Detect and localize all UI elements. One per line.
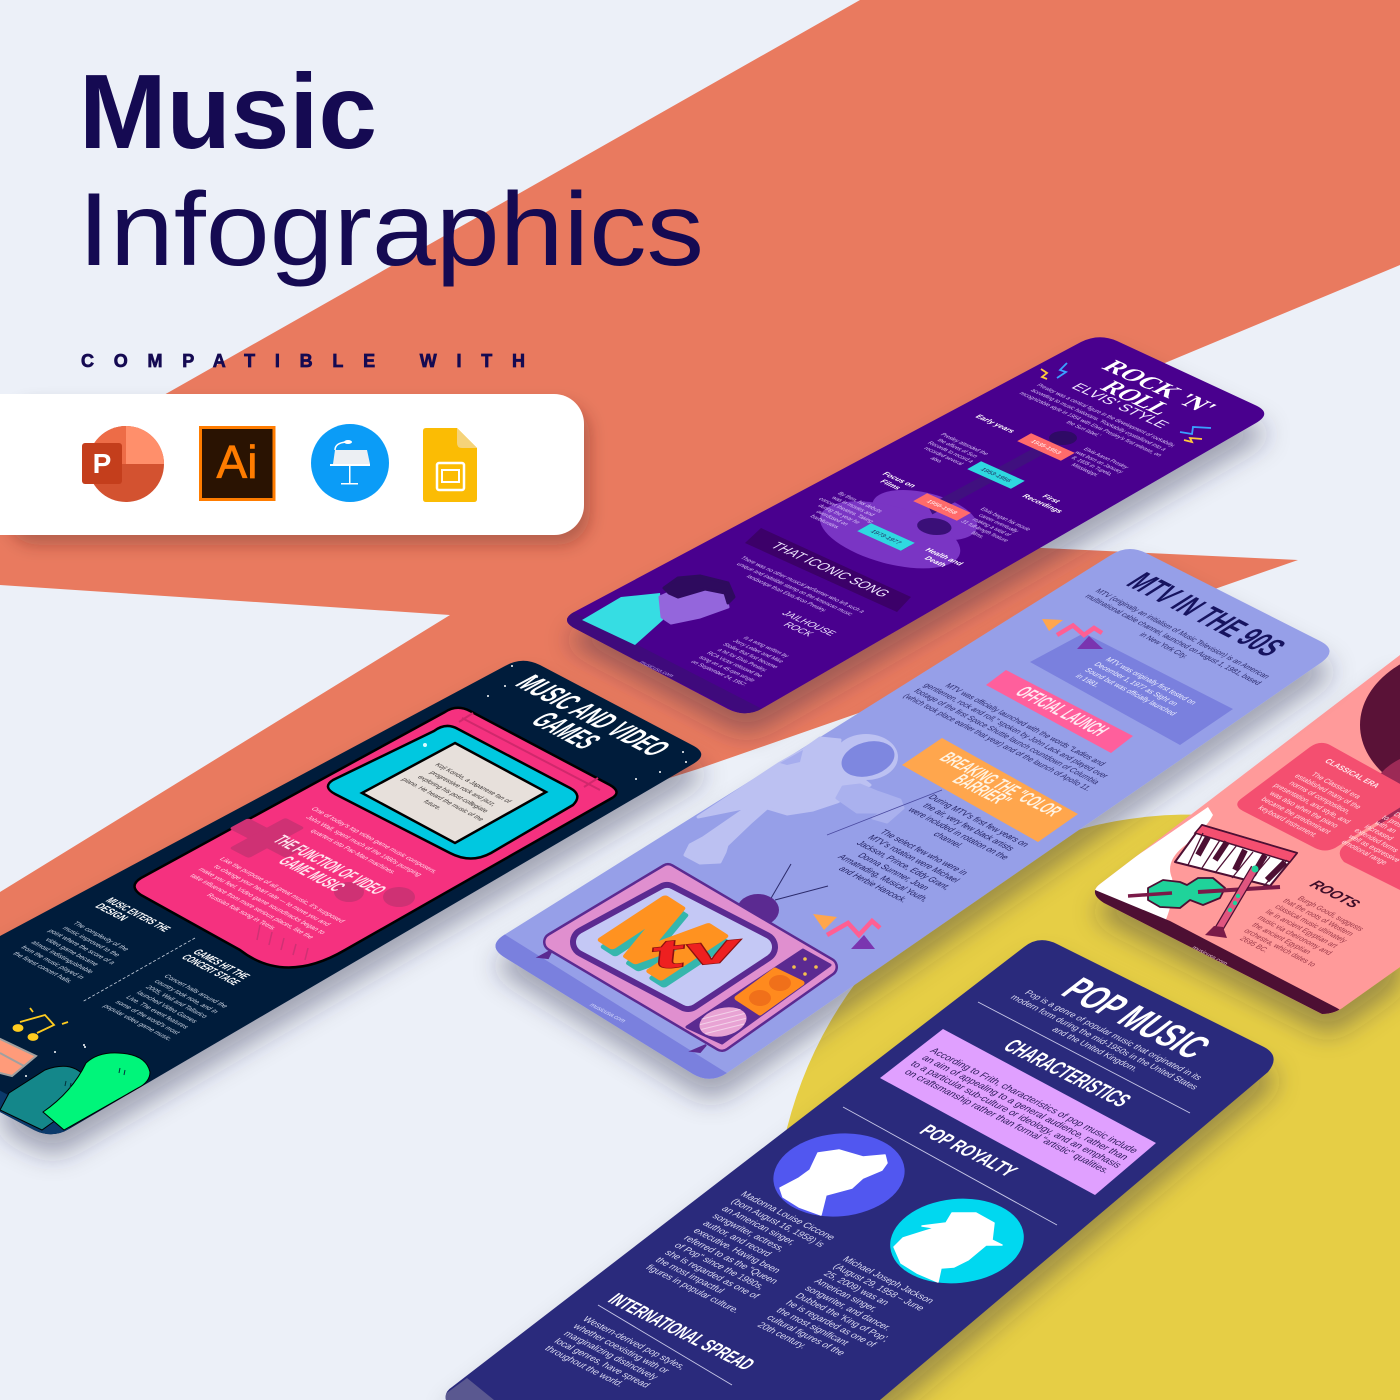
text: health detail: barbiturates.: [808, 514, 841, 530]
heading: classical era: CLASSICAL ERA: [1323, 757, 1382, 789]
text: Michael Jackson biography: American singer,: [811, 1277, 880, 1314]
label: official launch: [986, 670, 1133, 753]
label: First Recordings: First: [1040, 493, 1063, 504]
text: health detail: By then, his debuts: [835, 492, 883, 514]
text: concert stage detail: some of the world's most: [113, 1000, 181, 1036]
icon: zigzag shapes bottom: [813, 914, 880, 949]
text: concert stage detail: country took note, and in: [152, 979, 220, 1015]
date tag 1956-1958: [913, 493, 971, 521]
text: Jailhouse Rock detail: song on a 45-rpm single: [697, 656, 757, 683]
text: pop intro: and the United Kingdom.: [1050, 1025, 1141, 1073]
heading: pop music: POP MUSIC: [1052, 971, 1221, 1065]
text: tested note: in 1981.: [1073, 672, 1103, 689]
background orange shape: [0, 0, 1400, 1000]
text: select few detail: Jackson, Prince, Eddy Grant,: [854, 839, 954, 891]
panel: music and video games card: [0, 661, 701, 1145]
text: pop intro: Pop is a genre of popular music that originated in its: [1022, 988, 1205, 1082]
panel: classical era: [1237, 743, 1400, 850]
text: recordings detail: Presley attended the: [938, 433, 990, 457]
label: official launch: OFFICIAL LAUNCH: [1010, 683, 1115, 739]
text: roots detail: music via cheironomy and: [1255, 914, 1335, 957]
text: MTV intro: multinational cable channel, launched on August 1, 1981, based: [1083, 593, 1264, 686]
heading: games hit the concert stage: GAMES HIT THE: [190, 947, 253, 981]
subheading: Elvis' style: ELVIS' STYLE: [1067, 381, 1173, 430]
heading: Jailhouse Rock: JAILHOUSE: [779, 610, 838, 638]
text: Madonna biography: author, and record: [700, 1219, 774, 1259]
text: pop intro: modern form during the mid-1950s in the United States: [1008, 993, 1201, 1091]
icon: Illustrator: Ai: [217, 436, 257, 488]
heading: function of video game music: GAME MUSIC: [273, 854, 350, 894]
violin: [1128, 878, 1280, 908]
footer strip: [567, 612, 762, 714]
text: music enters detail: point where the score of a: [46, 929, 117, 966]
icon: PowerPoint: [82, 426, 164, 502]
footer strip: [1094, 890, 1340, 1014]
heading: Rock 'n' Roll: ROLL: [1094, 377, 1179, 418]
panel: tested note: [1030, 633, 1233, 745]
MTV logo: tv: [641, 924, 755, 978]
divider lines: [598, 1002, 1190, 1385]
illustration: guitar: [795, 431, 1077, 581]
heading: games hit the concert stage: CONCERT STAGE: [178, 953, 244, 987]
TV control panel: [687, 950, 830, 1043]
text: color barrier detail: During MTV's first few years on: [926, 793, 1032, 848]
label: Early years: Early years: [973, 413, 1017, 434]
text: roots detail: the ancient Egyptian: [1250, 921, 1314, 956]
text: function detail: make you feel. Video game soundtracks began to: [196, 867, 327, 935]
text: characteristics detail: on craftsmanship rather than formal "artistic" qualities.: [901, 1068, 1112, 1176]
text: early years detail: Mississippi.: [1069, 463, 1100, 478]
console speaker grooves: [257, 925, 308, 960]
illustration: MTV television: [539, 864, 830, 1052]
text: second box detail: increased: [1362, 823, 1396, 842]
text: films detail: making a total of: [970, 518, 1012, 537]
text: concert stage detail: popular video game music.: [101, 1004, 174, 1042]
screen text: future.: [421, 799, 443, 811]
text: Madonna biography: figures in popular culture.: [643, 1263, 742, 1315]
text: function detail: take influence from more serious places, like the: [188, 873, 315, 940]
label: Focus on Films: Films: [878, 478, 903, 491]
text: roots detail: orchestra, which dates to: [1242, 927, 1318, 968]
screen text: piano. He heard the music of the: [399, 777, 486, 822]
label: breaking the color barrier: [902, 738, 1078, 842]
TV dial buttons: [737, 970, 802, 1013]
text: official launch detail: gentlemen, rock and roll," spoken by John Lack and played over: [921, 682, 1111, 780]
icon: music note: [14, 1008, 68, 1040]
text: Madonna biography: the most impactful: [652, 1256, 727, 1295]
text: roots detail: lie in ancient Egyptian art: [1263, 908, 1341, 950]
text: films detail: Elvis began his movie: [978, 507, 1032, 532]
decoration: confetti zigzags: [1041, 363, 1211, 442]
text: official launch detail: (which took place earlier that year) and of the launch of Apollo 11.: [901, 692, 1094, 792]
illustration: game console: [134, 708, 617, 968]
text: music enters detail: The complexity of the: [71, 921, 130, 952]
icon: Google Slides: [423, 428, 477, 502]
text: music enters detail: almost indistinguishable: [29, 940, 95, 975]
footer: musicusa: musicusa.com: [1189, 945, 1229, 967]
text: Madonna biography: she is regarded as one of: [662, 1248, 762, 1301]
text: second box detail: with an: [1372, 819, 1399, 835]
text: recordings detail: Records to record a: [925, 441, 975, 464]
text: international spread detail: Western-derived pop styles,: [580, 1315, 688, 1372]
panel: pop music card: [440, 940, 1274, 1400]
text: characteristics detail: According to Frith, characteristics of pop music include: [927, 1047, 1141, 1156]
text: second box detail: emotional range: [1339, 838, 1390, 866]
text: tested note: December 1, 1977 as Sight on: [1092, 661, 1181, 707]
label: breaking the color barrier: BARRIER": [947, 771, 1016, 809]
text: Michael Jackson biography: cultural figures of the: [764, 1313, 848, 1358]
text: tested note: MTV was originally first tested on: [1103, 656, 1199, 706]
text: Madonna biography: an American singer,: [719, 1205, 798, 1247]
heading: function of video game music: [268, 833, 391, 897]
text: concert stage detail: Live. The event features: [124, 995, 190, 1030]
MTV logo: M: [576, 882, 749, 995]
console screen surround: [328, 726, 577, 858]
screen text: progressive rock and jazz,: [427, 770, 498, 807]
white corner shape: [1090, 807, 1213, 922]
intro text: according to music historians. 'Rockabilly crystallized into a: [1028, 388, 1169, 452]
illustration: ghost characters: [0, 1053, 150, 1130]
text: Madonna biography: songwriter, actress,: [709, 1212, 788, 1254]
text: select few detail: Armatrading, Musical Youth,: [836, 853, 932, 903]
footer strip: [496, 934, 727, 1079]
icon: Keynote: [311, 424, 389, 502]
label: Focus on Films: Focus on: [880, 471, 919, 489]
decoration: stars: [25, 665, 687, 1077]
text: Madonna biography: of Pop" since the 1980s,: [671, 1241, 767, 1292]
text: Madonna biography: referred to as the "Queen: [681, 1234, 780, 1286]
text: official launch detail: MTV was officially launched with the words "Ladies and: [943, 682, 1108, 767]
text: Michael Jackson biography: 20th century.: [754, 1321, 809, 1351]
text: Michael Jackson biography: he is regarded as one of: [783, 1299, 879, 1349]
heading: music and video games: [507, 671, 679, 761]
text: Jailhouse Rock detail: Stoller that first became: [721, 643, 780, 670]
text: iconic song intro: There was no other musical performer who left such a: [738, 556, 867, 614]
date tag 1935-1953: 1935-1953: [1028, 439, 1063, 455]
text: Madonna biography: executive. Having been: [690, 1226, 783, 1275]
text: films detail: films.: [968, 531, 986, 540]
text: Michael Jackson biography: songwriter, and dancer.: [802, 1284, 894, 1333]
text: Michael Jackson biography: Michael Joseph Jackson: [840, 1255, 936, 1306]
text: recordings detail: the offices of Sun: [935, 438, 979, 459]
console screen: [362, 743, 546, 843]
label: Health and Death: Health and: [923, 547, 966, 567]
heading: function of video game music: THE FUNCTION OF VIDEO: [268, 833, 391, 897]
text: composers: One of today's top video game music composers,: [309, 807, 439, 875]
heading: Jailhouse Rock: ROCK: [780, 621, 816, 638]
text: Michael Jackson biography: the most significant: [773, 1306, 851, 1348]
text: select few detail: The select few who were in: [877, 828, 971, 877]
text: select few detail: MTV's rotation were Michael: [866, 833, 963, 884]
text: international spread detail: whether coexisting with or: [569, 1322, 672, 1375]
text: classical era detail: The Classical era: [1309, 771, 1364, 801]
pointer line: [827, 790, 942, 835]
portrait: Michael Jackson: [863, 1182, 1051, 1300]
text: classical era detail: keyboard instrument.: [1256, 804, 1320, 839]
text: Michael Jackson biography: 25, 2009) was an: [821, 1270, 891, 1307]
text: music enters detail: the finest concert halls.: [11, 951, 74, 985]
text: Jailhouse Rock detail: a hit for Elvis Presley.: [715, 648, 769, 673]
illustration: Elvis: [582, 576, 734, 645]
panel: compatible software: [0, 394, 584, 535]
panel: classical music card: [1088, 645, 1400, 1022]
title: Music: [79, 53, 377, 171]
panel: MTV in the 90s card: [480, 549, 1330, 1090]
text: health detail: overdosed on: [814, 510, 849, 527]
text: Madonna biography: (born August 16, 1958) is: [728, 1197, 827, 1249]
text: classical era detail: established many of the: [1292, 772, 1364, 811]
text: color barrier detail: were included in rotation on the: [905, 805, 1012, 861]
text: music enters detail: video game became: [43, 937, 100, 967]
MTV logo: M: [579, 889, 752, 1002]
text: concert stage detail: 2005, Wall and Tallarico: [143, 985, 209, 1019]
date tag 1953-1956: [967, 461, 1025, 489]
piano: [1175, 825, 1297, 887]
text: classical era detail: presentation, and style, and: [1271, 781, 1353, 825]
text: films detail: 31 full-length feature: [959, 520, 1010, 543]
date tag 1973-1977: [857, 523, 915, 551]
heading: music and video games: MUSIC AND VIDEO: [507, 671, 679, 761]
banner: that iconic song: THAT ICONIC SONG: [766, 540, 894, 599]
intro text: recognizable style in 1954 with Elvis Presley's first release, on: [1017, 391, 1164, 458]
text: composers: John Wall, spent much of the 1980s pumping: [304, 815, 423, 877]
footer strip: [446, 1378, 494, 1400]
text: classical era detail: was also when the piano: [1266, 789, 1341, 829]
footer strip: [0, 1090, 70, 1134]
label: breaking the color barrier: BREAKING THE "COLOR: [934, 749, 1067, 820]
text: MTV intro: MTV (originally an initialism of Music Television) is an American: [1093, 587, 1272, 680]
intro text: the Sun label.': [1064, 420, 1103, 438]
text: composers: quarters into Pac-Man machines.: [308, 829, 398, 875]
text: function detail: to change your heart rate — to move you and: [211, 864, 332, 927]
heading: Rock 'n' Roll: ROCK 'N': [1095, 357, 1223, 417]
console d-pad: [210, 808, 324, 868]
illustration: instruments: [1128, 825, 1297, 938]
label: First Recordings: Recordings: [1020, 493, 1065, 514]
date tag 1973-1977: 1973-1977: [868, 529, 903, 545]
title: Infographics: [78, 172, 704, 288]
text: color barrier detail: channel.: [931, 830, 966, 850]
screen text: exploring his post-collegiate: [415, 775, 490, 814]
TV speaker: [696, 1003, 750, 1041]
text: concert stage detail: launched Video Games: [134, 990, 199, 1024]
text: Jailhouse Rock detail: on September 24, 1957.: [689, 660, 748, 688]
text: health detail: during the year he: [816, 504, 862, 525]
text: roots detail: Burgh Goodi, suggests: [1295, 894, 1366, 933]
text: international spread detail: marginalizing distinctively: [561, 1330, 661, 1382]
text: health detail: concert theatres. Taking: [816, 497, 874, 524]
heading: music enters the design: MUSIC ENTERS THE: [102, 896, 174, 933]
icon: PowerPoint: P: [93, 448, 111, 479]
text: characteristics detail: an aim of appealing to a general audience, rather than: [919, 1054, 1131, 1162]
date tag 1935-1953: [1017, 433, 1075, 461]
text: second box detail: extended forms: [1352, 827, 1400, 854]
text: function detail: Russian folk song in Tetris.: [204, 893, 278, 931]
text: function detail: Like the purpose of all great music, it's supposed: [217, 857, 346, 924]
heading: MTV in the 90s: MTV IN THE 90S: [1118, 567, 1295, 662]
illustration: bricks: [0, 1037, 36, 1076]
intro text: Presley was a central figure in the development of rockabilly,: [1034, 383, 1178, 448]
text: characteristics detail: to a particular sub-culture or ideology, and an emphasis: [907, 1060, 1124, 1170]
background yellow circle: [774, 815, 1400, 1400]
illustration: astronaut: [685, 734, 903, 863]
text: roots detail: 2695 BC.: [1238, 935, 1271, 954]
console button B: [334, 882, 364, 902]
text: early years detail: was born on January: [1072, 450, 1124, 474]
text: concert stage detail: Concert halls around the: [162, 974, 229, 1009]
text: early years detail: Elvis Aaron Presley: [1081, 447, 1130, 470]
text: music enters detail: music improved to the: [60, 926, 121, 958]
panel: classical era second box: [1340, 812, 1400, 890]
text: health detail: was in movies and: [828, 495, 876, 517]
text: Michael Jackson biography: Dubbed the 'King of Pop',: [792, 1291, 892, 1344]
text: recordings detail: recorded several: [922, 447, 964, 466]
console button A: [383, 887, 415, 907]
text: tested note: Sound but was officially launched: [1082, 667, 1179, 717]
date tag 1956-1958: 1956-1958: [924, 499, 959, 515]
text: music enters detail: from the music played in: [19, 945, 86, 980]
footer: musicusa: musicusa.com: [637, 661, 675, 678]
heading: music enters the design: DESIGN: [92, 901, 132, 922]
screen text: Koji Kondo, a Japanese fan of: [433, 762, 513, 804]
text: international spread detail: throughout the world.: [542, 1344, 626, 1389]
divider: dashed line: [82, 938, 195, 1002]
portrait: Madonna: [746, 1117, 932, 1233]
text: select few detail: Donna Summer, Joan: [855, 851, 932, 892]
text: roots detail: classical music ultimately: [1273, 903, 1350, 944]
footer: musicusa: musicusa.com: [587, 1002, 627, 1024]
illustration: disc: [1360, 664, 1400, 824]
text: Jailhouse Rock detail: Jerry Leiber and Mike: [731, 639, 785, 664]
banner: that iconic song: [745, 528, 911, 612]
TV knob dots: [792, 957, 818, 976]
clarinet: [1205, 866, 1258, 938]
panel: rock n roll card: [550, 337, 1264, 724]
text: classical era detail: norms of composition,: [1287, 779, 1354, 815]
icon: zigzag shapes top: [1042, 619, 1103, 649]
date tag 1953-1956: 1953-1956: [978, 467, 1013, 483]
text: films detail: career eventually: [976, 513, 1020, 534]
heading: pop royalty: POP ROYALTY: [914, 1122, 1022, 1180]
text: color barrier detail: the air, very few black artists: [920, 802, 1018, 853]
text: international spread detail: local genres, have spread: [551, 1337, 652, 1390]
text: Michael Jackson biography: (August 29, 1958 – June: [830, 1262, 927, 1313]
text: select few detail: and Herbie Hancock.: [836, 865, 911, 904]
text: recordings detail: also.: [928, 456, 944, 464]
text: Jailhouse Rock detail: is a song written by: [741, 636, 790, 659]
heading: music and video games: GAMES: [522, 708, 609, 754]
panel: characteristics: [880, 1029, 1156, 1195]
text: early years detail: 8, 1935 in Tupelo,: [1069, 456, 1114, 477]
text: roots detail: that the roots of Western: [1281, 897, 1356, 938]
timeline: [796, 413, 1131, 572]
text: classical era detail: became the predominant: [1259, 795, 1333, 835]
text: Madonna biography: Madonna Louise Ciccone: [738, 1190, 837, 1242]
title: [78, 53, 704, 288]
text: MTV intro: in New York City.: [1137, 631, 1191, 660]
label: Health and Death: Death: [922, 555, 949, 568]
heading: roots: ROOTS: [1306, 878, 1364, 911]
text: iconic song intro: landscape than Elvis Aron Presley.: [744, 574, 829, 613]
compatible with label: COMPATIBLE WITH: [81, 351, 525, 371]
icon: Illustrator: [200, 428, 274, 500]
text: iconic song intro: unique and indelible stamp on the American music: [734, 562, 855, 617]
heading: characteristics: CHARACTERISTICS: [997, 1036, 1137, 1111]
text: official launch detail: footage of the first Space Shuttle launch countdown of Columbia: [912, 687, 1102, 786]
text: Jailhouse Rock detail: RCA Victor released the: [705, 651, 764, 679]
